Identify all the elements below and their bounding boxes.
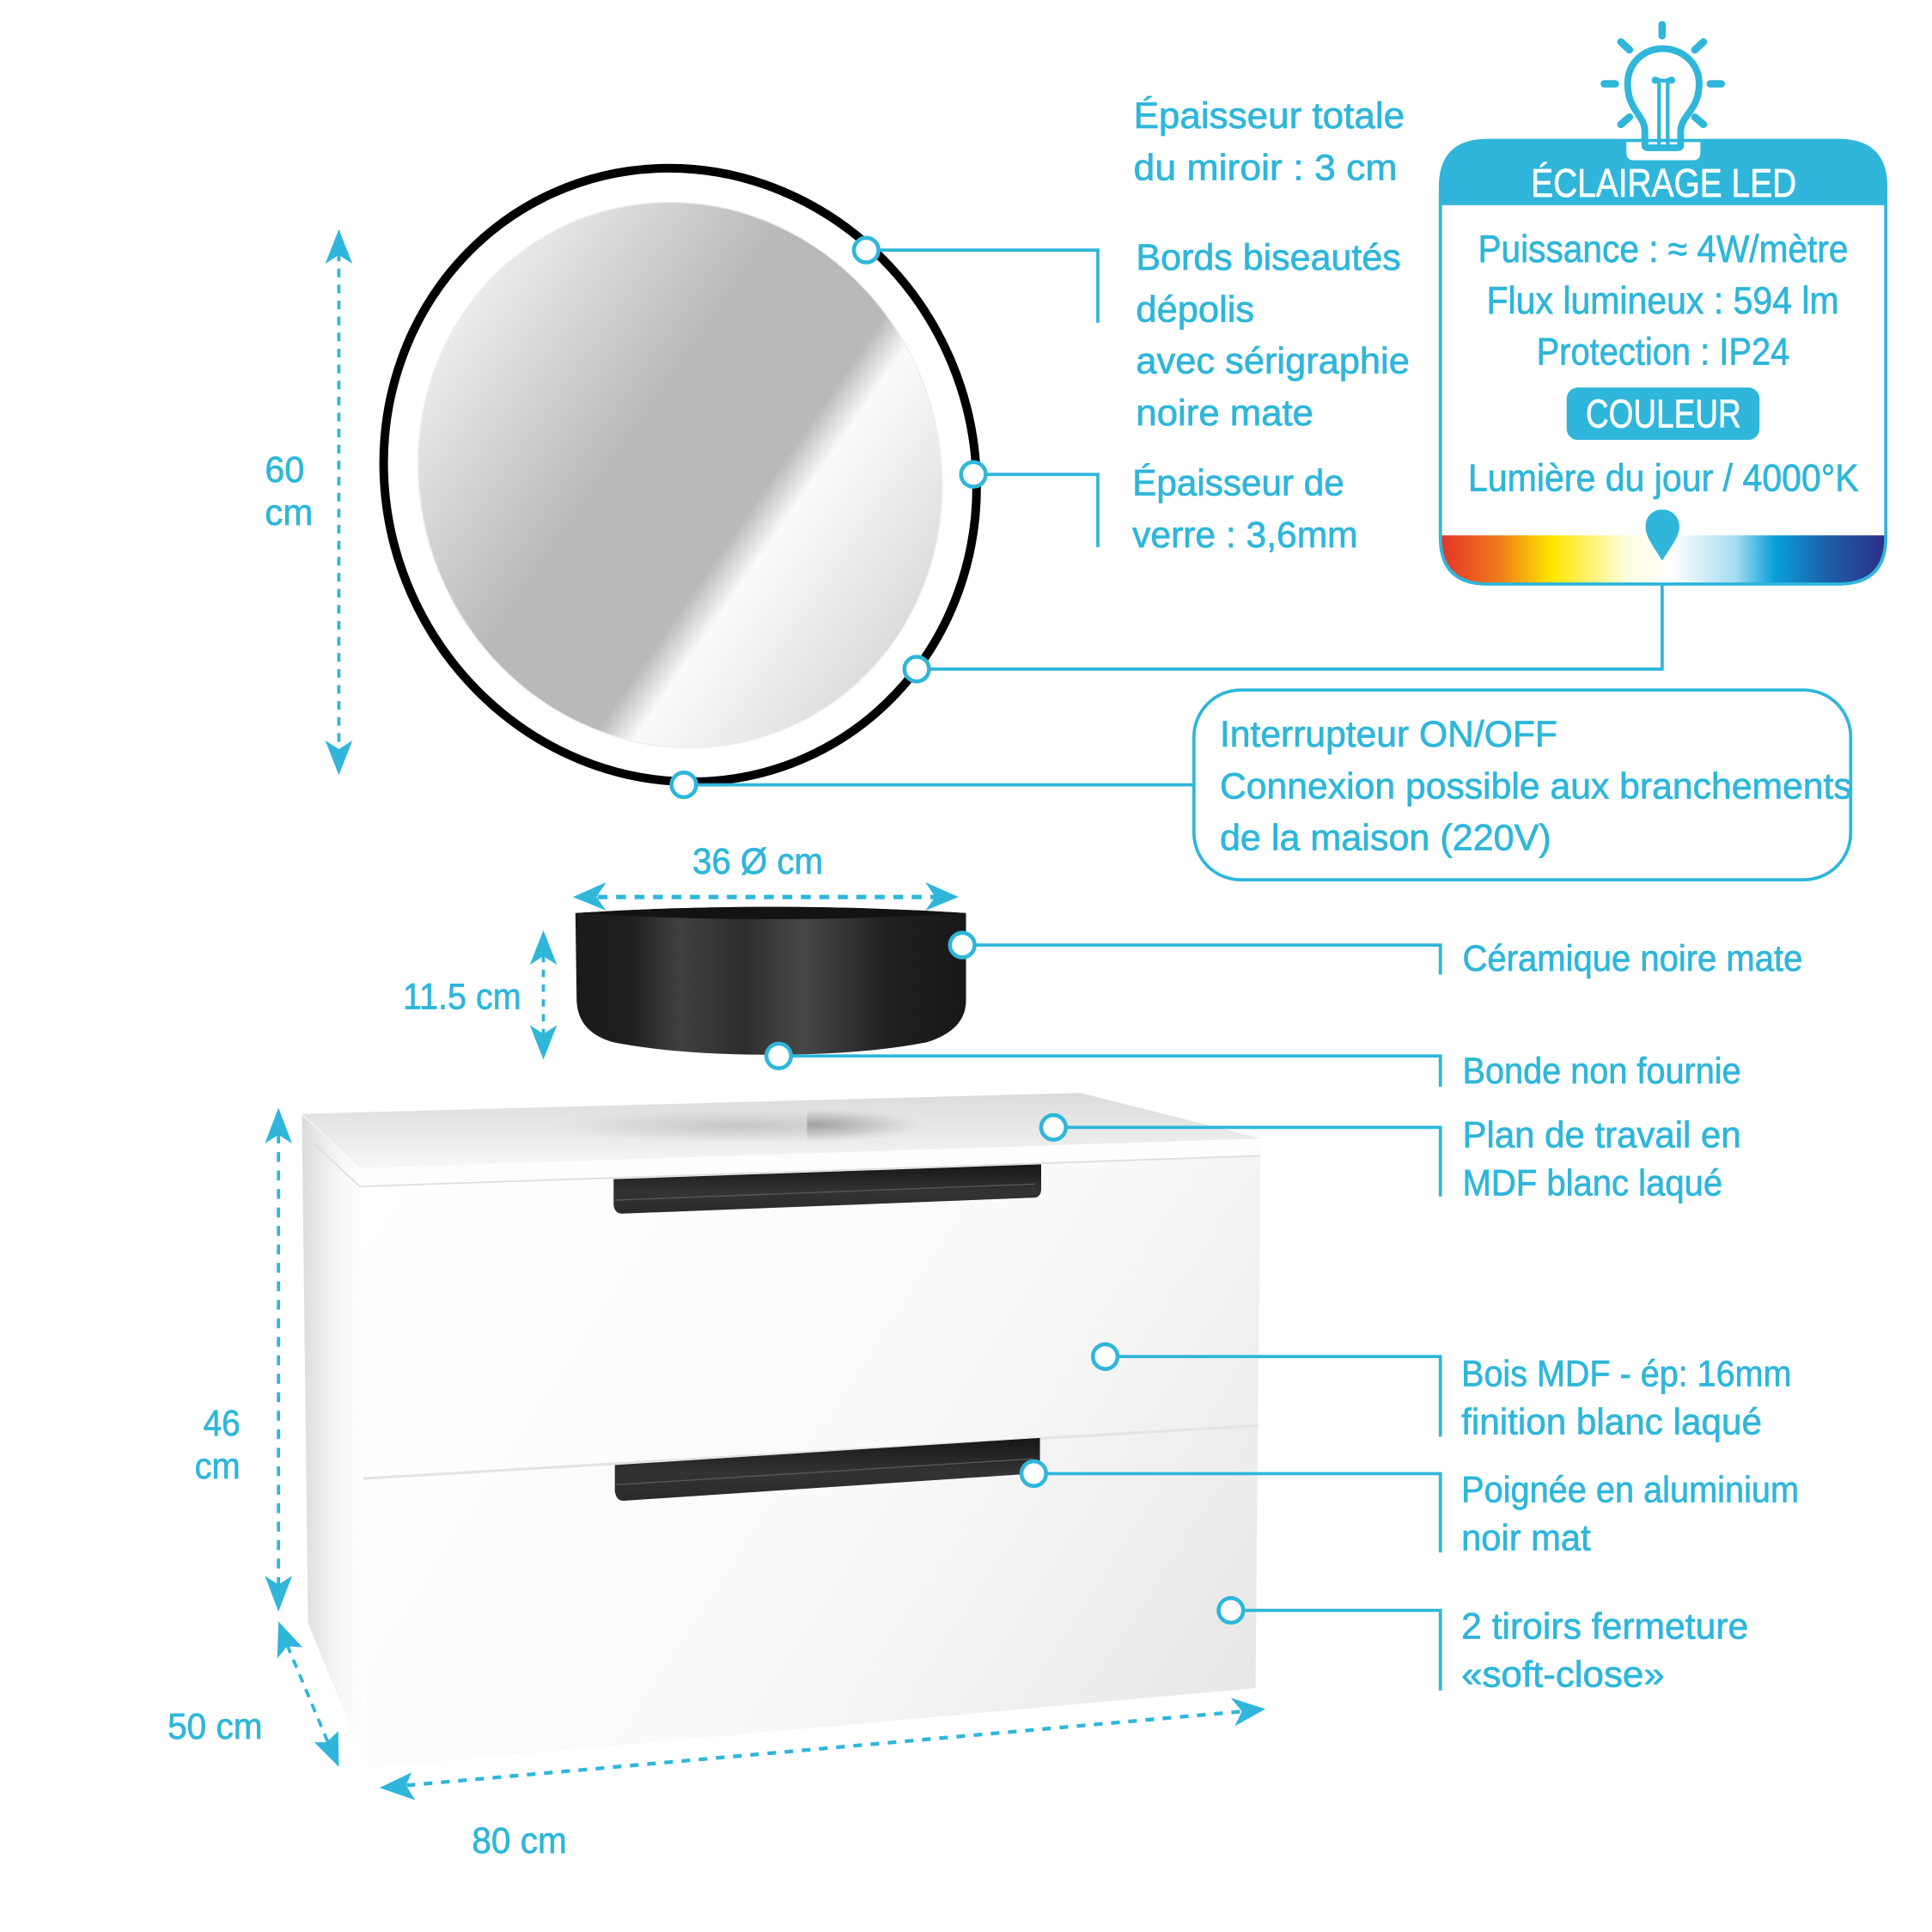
- connector: bevelled edges: [866, 250, 1098, 323]
- cabinet side: [302, 1115, 367, 1768]
- heading: éclairage LED: ÉCLAIRAGE LED: [1531, 161, 1796, 205]
- text: handle: Poignée en aluminium: [1461, 1469, 1799, 1510]
- panel border: [1441, 141, 1886, 584]
- colour temperature gradient: [1441, 535, 1886, 585]
- text: power: Puissance : ≈ 4W/mètre: [1478, 229, 1848, 271]
- text: MDF wood: Bois MDF - ép: 16mm: [1461, 1354, 1791, 1395]
- dimension: mirror height 60 cm: 60: [265, 449, 304, 491]
- vessel sink: [576, 907, 966, 1055]
- dimension: cabinet height 46 cm: cm: [195, 1446, 241, 1487]
- connector: switch callout: [684, 783, 1194, 786]
- text: bevelled edges: avec sérigraphie: [1136, 341, 1410, 382]
- text: mirror thickness: du miroir : 3 cm: [1134, 147, 1398, 188]
- text: MDF wood: [1461, 1354, 1791, 1443]
- text: glass thickness: [1132, 463, 1358, 556]
- text: worktop: [1463, 1114, 1741, 1204]
- badge: couleur: COULEUR: [1586, 392, 1741, 436]
- bulb filament: [1654, 78, 1673, 144]
- dimension: cabinet height 46 cm: 46: [204, 1403, 241, 1444]
- text: mirror thickness: Épaisseur totale: [1134, 95, 1405, 137]
- mirror glass: [336, 123, 1024, 827]
- cabinet front: [360, 1155, 1260, 1768]
- bulb glass: [1628, 49, 1699, 148]
- panel header: [1441, 141, 1886, 205]
- dimension: sink diameter 36 cm: 36 Ø cm: [692, 841, 823, 882]
- connector: glass thickness: [973, 474, 1098, 547]
- dimension: sink height 11.5 cm: [403, 930, 557, 1060]
- bulb rays: [1604, 25, 1722, 125]
- dimension: mirror height 60 cm: [265, 229, 352, 775]
- dimension: depth 50 cm: 50 cm: [168, 1706, 263, 1747]
- icon: light bulb: [1604, 25, 1722, 148]
- dimension: cabinet height 46 cm: [195, 1107, 292, 1612]
- connector: ceramic: [962, 945, 1441, 975]
- text: MDF wood: finition blanc laqué: [1461, 1402, 1762, 1443]
- text: drawers: 2 tiroirs fermeture: [1461, 1606, 1748, 1648]
- text: bevelled edges: dépolis: [1136, 289, 1254, 330]
- text: drain: Bonde non fournie: [1463, 1051, 1741, 1092]
- panel: LED lighting: [1441, 141, 1886, 585]
- dimension: mirror height 60 cm: cm: [265, 492, 313, 533]
- colour marker pin: [1646, 509, 1679, 561]
- mirror black frame: [286, 73, 1075, 877]
- callout: switch and connection: [1194, 690, 1852, 880]
- text: mirror thickness: [1134, 95, 1405, 188]
- connector: wood: [1106, 1356, 1441, 1436]
- dimension: width 80 cm: 80 cm: [472, 1820, 567, 1862]
- text: luminous flux: Flux lumineux : 594 lm: [1486, 280, 1839, 322]
- round mirror: [286, 73, 1075, 877]
- connector: drawers: [1231, 1611, 1441, 1691]
- text: glass thickness: Épaisseur de: [1132, 463, 1344, 504]
- top drawer handle: [613, 1164, 1041, 1214]
- dimension: sink diameter 36 cm: [573, 841, 959, 911]
- text: protection: Protection : IP24: [1537, 332, 1789, 374]
- text: drawers: «soft-close»: [1461, 1655, 1665, 1696]
- text: daylight: Lumière du jour / 4000°K: [1468, 458, 1859, 500]
- dimension: sink height 11.5 cm: 11.5 cm: [403, 977, 521, 1018]
- countertop top face: [302, 1093, 1262, 1168]
- text: drawers: [1461, 1606, 1748, 1696]
- countertop front edge: [360, 1138, 1262, 1186]
- text: worktop: MDF blanc laqué: [1463, 1162, 1722, 1204]
- sink shadow, darker half: [808, 1112, 899, 1139]
- sink shadow on countertop: [548, 1109, 930, 1143]
- bottom drawer handle: [615, 1438, 1040, 1501]
- connector: worktop: [1053, 1127, 1441, 1197]
- marker dots: [672, 238, 1243, 1623]
- connector: LED panel: [917, 584, 1662, 669]
- callout: switch and connection: Connexion possible aux branchements: [1220, 765, 1852, 807]
- text: bevelled edges: noire mate: [1136, 393, 1313, 434]
- text: handle: [1461, 1469, 1799, 1558]
- text: worktop: Plan de travail en: [1463, 1114, 1741, 1155]
- sink body: [576, 907, 966, 1055]
- text: bevelled edges: [1136, 237, 1410, 434]
- text: bevelled edges: Bords biseautés: [1136, 237, 1401, 278]
- text: handle: noir mat: [1461, 1517, 1591, 1558]
- callout: switch and connection: Interrupteur ON/OFF: [1220, 714, 1557, 755]
- panel body: [1441, 141, 1886, 584]
- connector: drain: [778, 1056, 1441, 1087]
- dimension: width 80 cm: [380, 1697, 1265, 1862]
- connector: handle: [1033, 1473, 1441, 1552]
- vanity cabinet: [302, 1093, 1262, 1768]
- sink rim: [576, 907, 966, 919]
- callout: switch and connection: de la maison (220V): [1220, 818, 1551, 859]
- text: ceramic: Céramique noire mate: [1463, 938, 1802, 979]
- dimension: depth 50 cm: [168, 1622, 338, 1767]
- text: glass thickness: verre : 3,6mm: [1132, 515, 1358, 556]
